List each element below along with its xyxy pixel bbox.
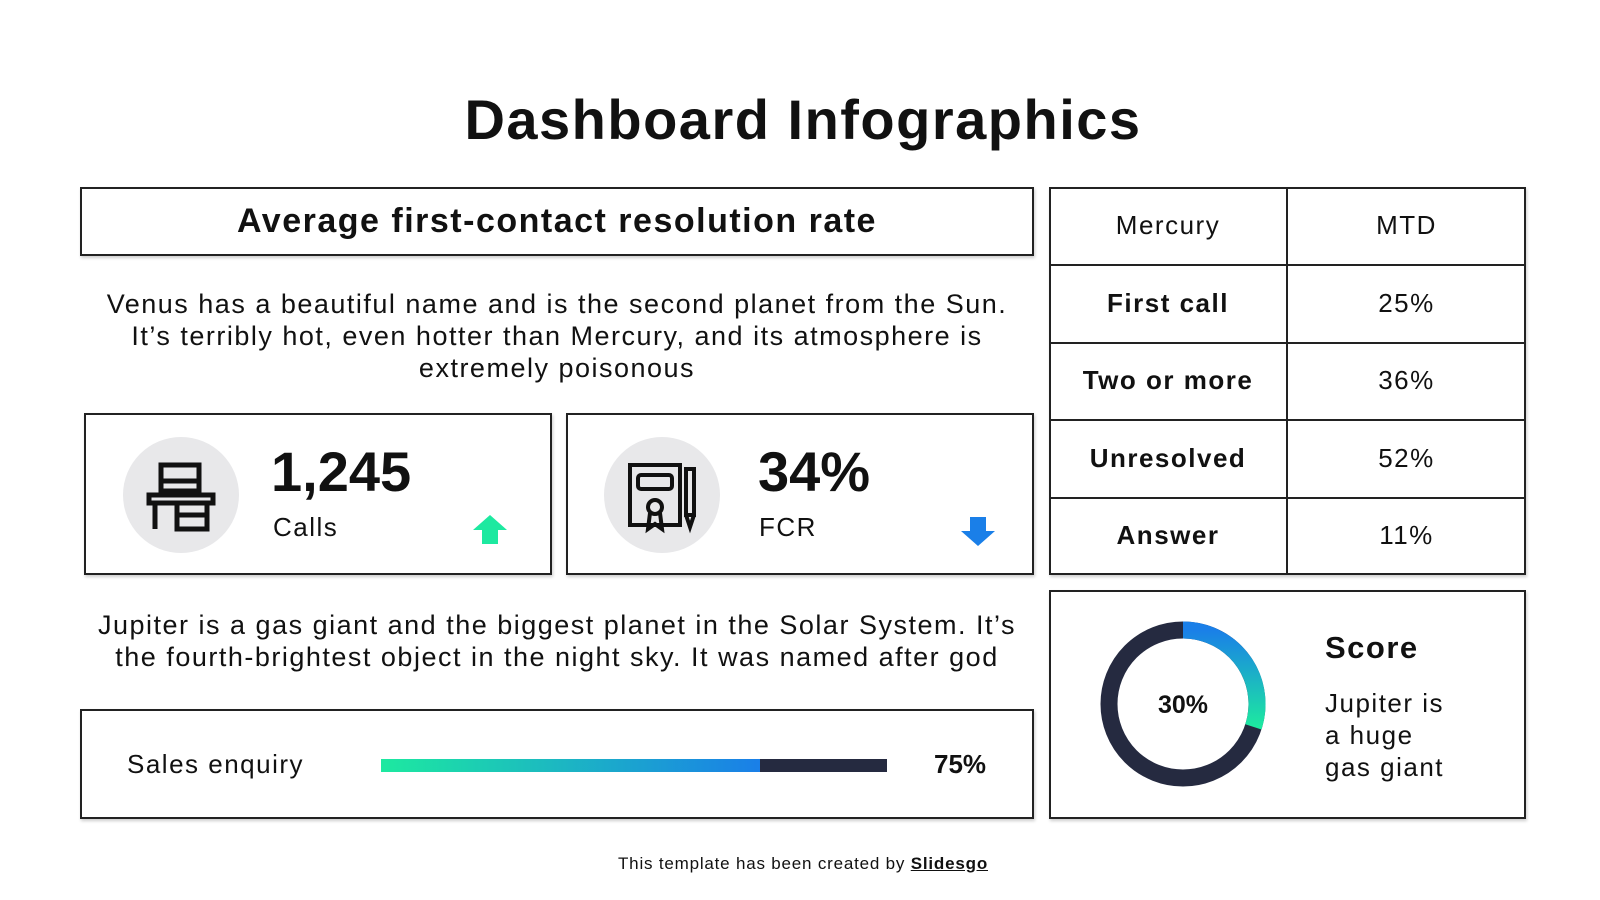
score text: Jupiter is (1325, 688, 1444, 718)
table rows: First call (1107, 288, 1229, 318)
value: 34% (758, 440, 870, 503)
label: Sales enquiry (127, 749, 304, 779)
paragraph: venus: It’s terribly hot, even hotter than Mercury, and its atmosphere is (131, 321, 983, 351)
header box: Average first-contact resolution rate (237, 202, 877, 240)
footer: This template has been created by Slidesgo (618, 854, 988, 873)
sales enquiry bar card (80, 709, 1034, 819)
table rows: Mercury (1116, 210, 1220, 240)
paragraph: jupiter: Jupiter is a gas giant and the biggest planet in the Solar System. It’s (98, 610, 1016, 640)
icon: arrow up (473, 515, 507, 544)
table rows (1083, 210, 1437, 550)
title: Dashboard Infographics (464, 88, 1142, 151)
value: 75% (934, 749, 986, 779)
table rows: Unresolved (1090, 442, 1246, 472)
score card (1049, 590, 1526, 819)
donut chart: 30% (1158, 691, 1208, 719)
paragraph: jupiter (98, 610, 1016, 672)
value: 1,245 (271, 440, 411, 503)
score text (1325, 688, 1444, 782)
donut chart (1100, 622, 1266, 786)
stat card: calls (84, 413, 552, 575)
icon: arrow down (961, 517, 995, 546)
progress bar (381, 759, 887, 772)
table (1049, 187, 1526, 575)
label: Calls (273, 512, 338, 542)
score text: a huge (1325, 720, 1414, 750)
score heading: Score (1325, 630, 1419, 665)
label: FCR (759, 512, 817, 542)
stat card: fcr (566, 413, 1034, 575)
table rows: 36% (1378, 365, 1435, 395)
icon: desk (123, 437, 239, 553)
header box (80, 187, 1034, 256)
icon: certificate (604, 437, 720, 553)
table rows: 52% (1378, 442, 1435, 472)
table rows: 11% (1379, 520, 1434, 550)
paragraph: venus: extremely poisonous (419, 353, 695, 383)
table rows: Two or more (1083, 365, 1253, 395)
paragraph: jupiter: the fourth-brightest object in the night sky. It was named after god (115, 642, 999, 672)
table rows: Answer (1117, 520, 1219, 550)
table rows: MTD (1376, 210, 1437, 240)
paragraph: venus (106, 289, 1007, 383)
paragraph: venus: Venus has a beautiful name and is the second planet from the Sun. (107, 289, 1007, 319)
score text: gas giant (1325, 752, 1444, 782)
table rows: 25% (1378, 288, 1435, 318)
